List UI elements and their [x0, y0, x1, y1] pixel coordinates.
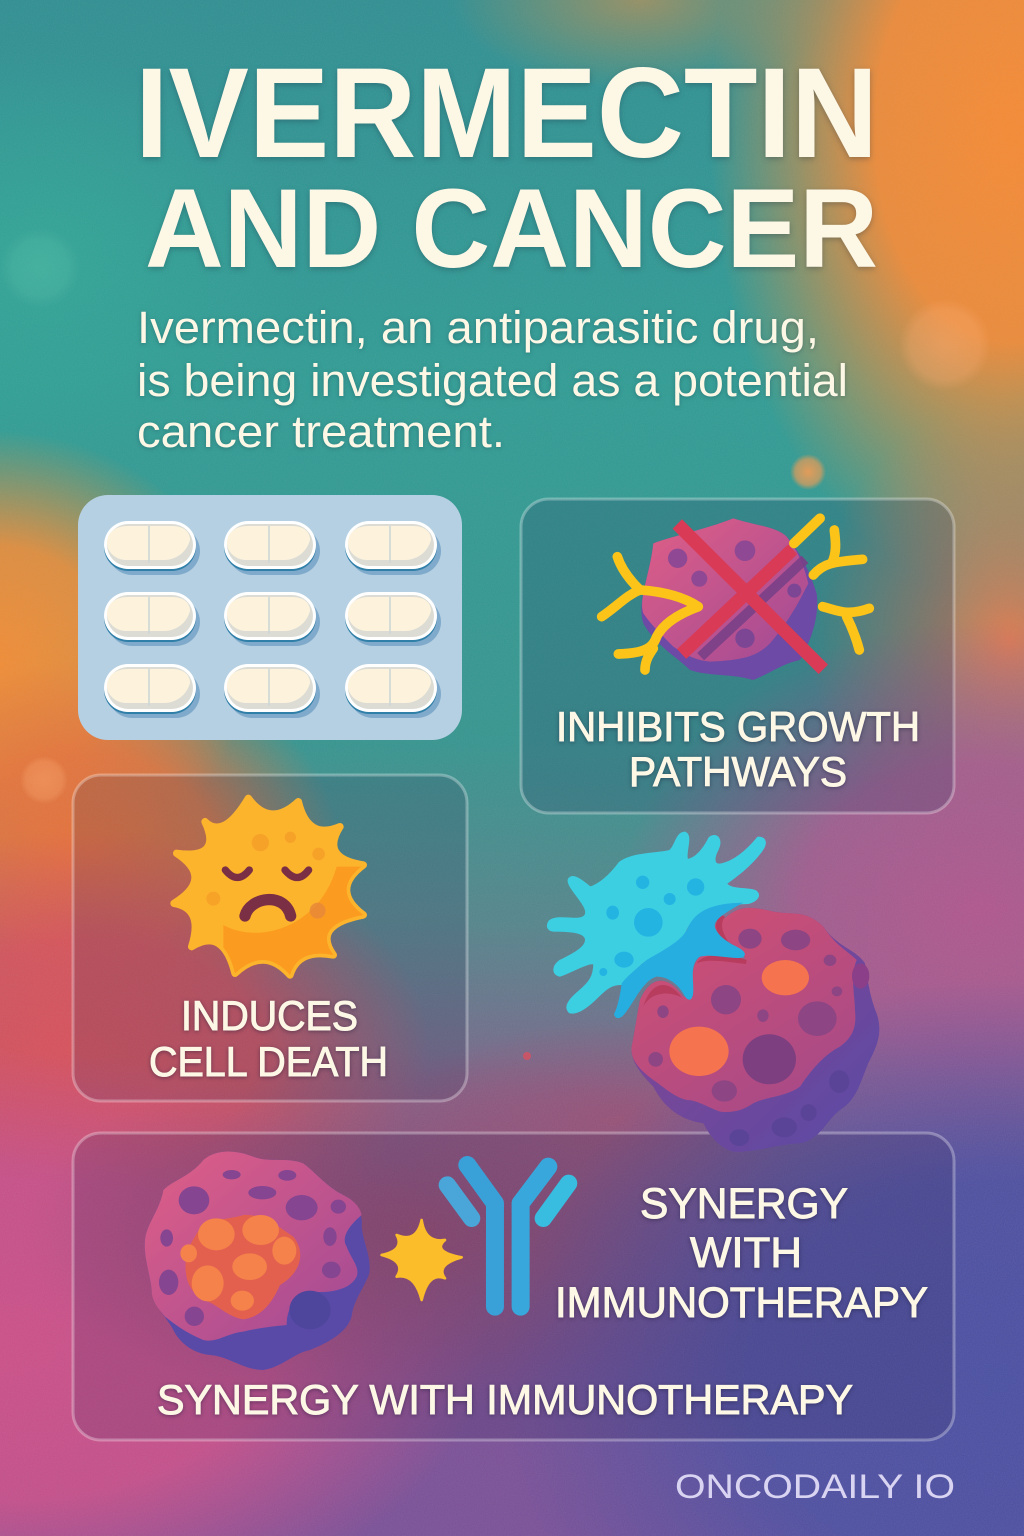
intro text	[137, 302, 848, 457]
title	[135, 42, 878, 291]
icon: tumor cell with orange core	[145, 1151, 370, 1370]
intro text: is being investigated as a potential	[137, 355, 848, 406]
label: synergy with immunotherapy (right): IMMUNOTHERAPY	[555, 1279, 928, 1327]
label: inhibits growth pathways	[556, 703, 920, 795]
label: induces cell death: CELL DEATH	[149, 1038, 388, 1085]
label: induces cell death	[149, 992, 388, 1085]
immune cell	[549, 833, 764, 1018]
panel: induces cell death	[73, 775, 467, 1101]
icon: tumor with crossed-out pathways	[602, 518, 869, 680]
label: synergy with immunotherapy (right): WITH	[690, 1229, 802, 1277]
blister pack of pills	[78, 495, 462, 740]
illustration: immune cell attacking tumor	[549, 833, 879, 1152]
label: synergy with immunotherapy (bottom): SYNERGY WITH IMMUNOTHERAPY	[157, 1376, 853, 1423]
icon: antibody	[447, 1165, 569, 1307]
intro text: cancer treatment.	[137, 406, 505, 457]
label: inhibits growth pathways: PATHWAYS	[629, 748, 847, 795]
panel: inhibits growth pathways	[521, 499, 954, 813]
label: induces cell death: INDUCES	[181, 992, 358, 1039]
panel: synergy with immunotherapy	[73, 1133, 954, 1440]
footer: source: ONCODAILY IO	[675, 1468, 955, 1506]
bokeh lights	[0, 228, 991, 1060]
label: synergy with immunotherapy (right): SYNERGY	[640, 1180, 848, 1228]
label: synergy with immunotherapy (right)	[555, 1180, 928, 1327]
intro text: Ivermectin, an antiparasitic drug,	[137, 302, 819, 353]
title: AND CANCER	[145, 166, 878, 291]
icon: yellow spark	[382, 1220, 462, 1300]
label: inhibits growth pathways: INHIBITS GROWTH	[556, 703, 920, 750]
icon: sad dying cell	[174, 798, 373, 983]
tumor cell	[631, 908, 879, 1152]
title: IVERMECTIN	[135, 42, 878, 185]
